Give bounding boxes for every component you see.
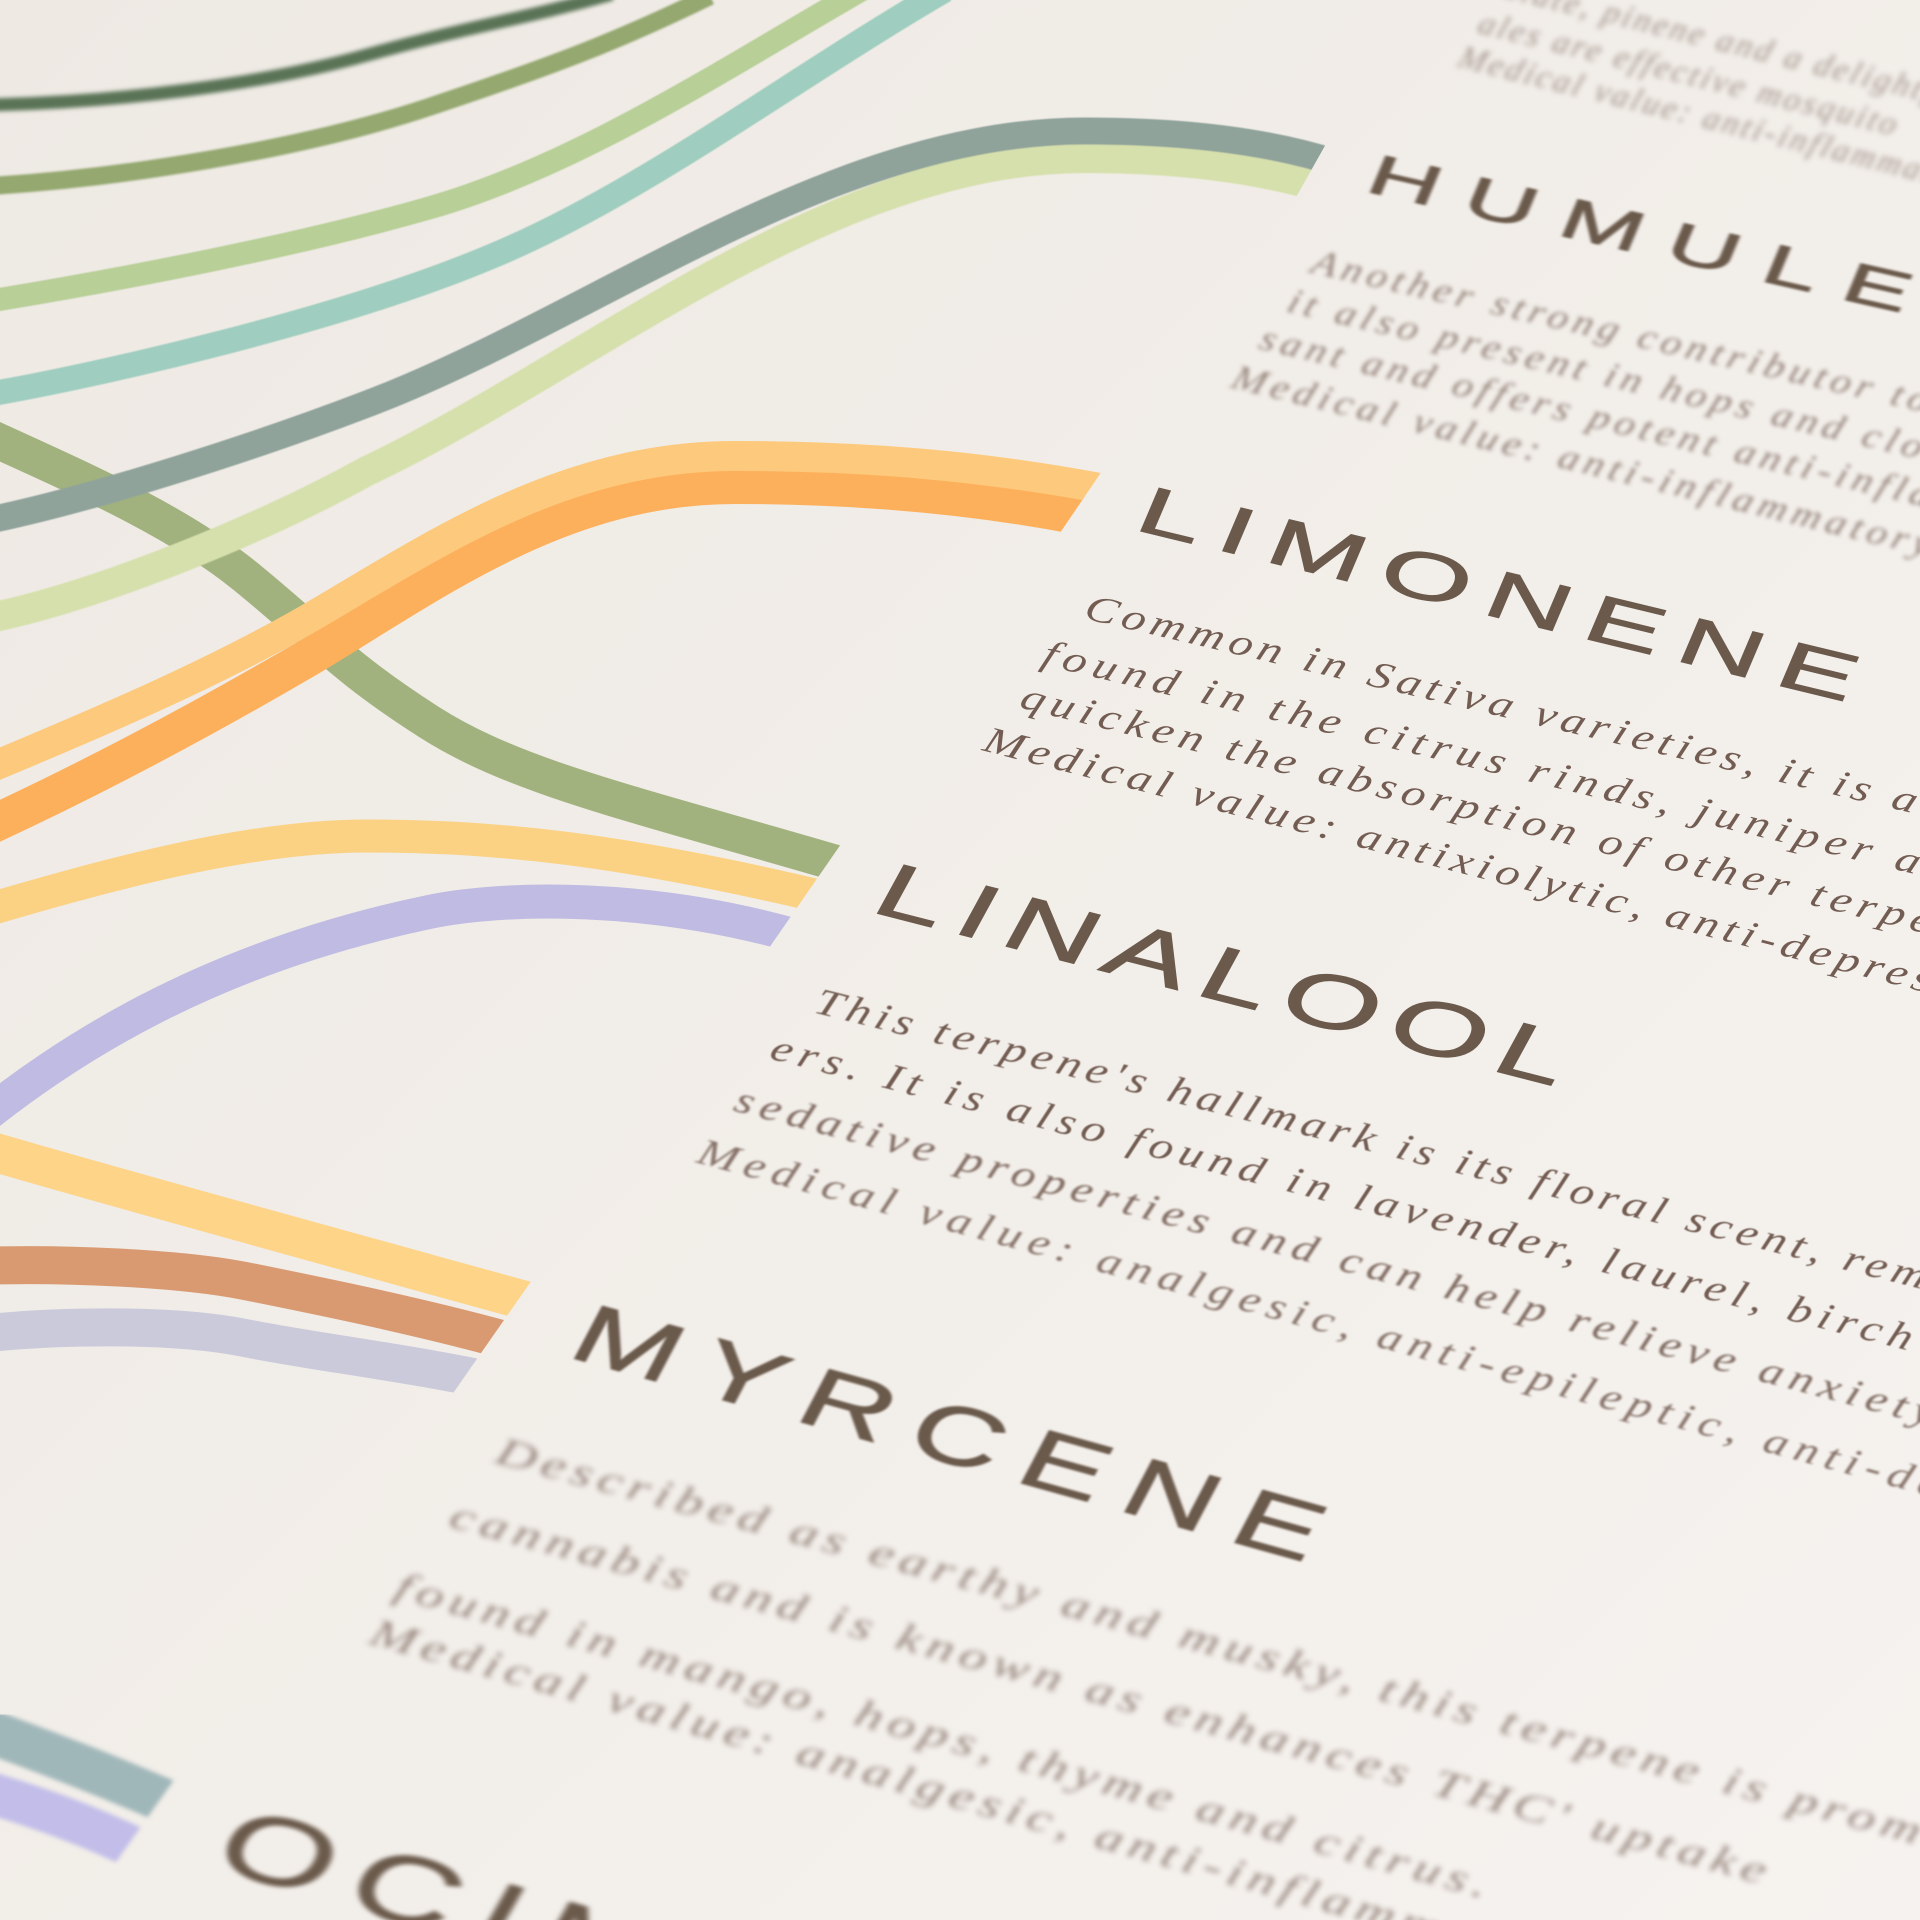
ribbons: humulene pair	[0, 131, 1345, 618]
ribbon: myrcene lavender grey	[0, 1327, 520, 1387]
ribbon: limonene orange	[0, 485, 1100, 830]
ribbon: dark green	[0, 0, 612, 105]
ribbon: teal	[0, 0, 945, 394]
heading: LINALOOL: LINALOOL	[860, 848, 1603, 1105]
text block: myrcene paragraph: cannabis and is known as enhances THC' uptake	[444, 1494, 1780, 1894]
heading: MYRCENE: MYRCENE	[556, 1287, 1365, 1585]
ribbon: linalool lilac	[0, 902, 810, 1128]
text block: linalool paragraph: sedative properties and can help relieve anxiety	[729, 1080, 1920, 1436]
ribbon: ocimene grey teal	[0, 1728, 200, 1816]
ribbons: myrcene trio	[0, 1145, 560, 1387]
ribbon: linalool olive	[0, 428, 860, 870]
text block: pinene paragraph fragment: ales are effective mosquito	[1473, 6, 1906, 143]
ribbon: myrcene brown	[0, 1265, 540, 1350]
ribbon: humulene pale green	[0, 158, 1330, 618]
text block: limonene paragraph	[977, 588, 1920, 1028]
text block: myrcene paragraph: found in mango, hops, thyme and citrus.	[389, 1565, 1501, 1908]
ribbon: linalool yellow	[0, 836, 840, 912]
ribbon: olive green	[0, 0, 710, 186]
ribbon: light green	[0, 0, 870, 301]
ribbons: linalool lower pair	[0, 836, 840, 1128]
ribbon: limonene yellow	[0, 456, 1110, 772]
ribbon: myrcene yellow	[0, 1145, 560, 1310]
ribbon: humulene grey green	[0, 131, 1345, 520]
ribbons: limonene pair	[0, 456, 1110, 830]
ribbon: ocimene lilac	[0, 1790, 160, 1860]
ribbons: ocimene pair	[0, 1728, 200, 1860]
heading: LIMONENE: LIMONENE	[1126, 473, 1889, 720]
